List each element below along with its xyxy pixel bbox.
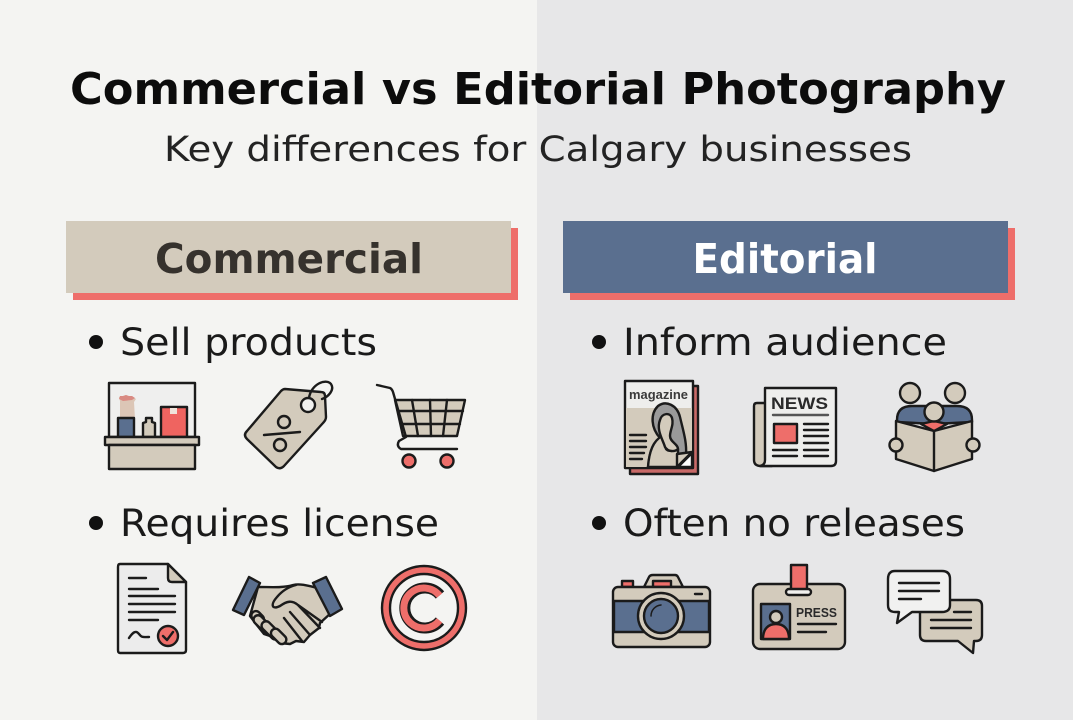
icon: newspaper: NEWS [771,394,828,413]
icon: newspaper [754,388,836,466]
icon: shopping cart [377,385,465,468]
icon: press badge [753,565,845,649]
icon: license document [118,564,186,653]
title: Commercial vs Editorial Photography [70,64,1006,115]
bullet: often no releases: Often no releases [623,502,965,545]
editorial header: Editorial [692,235,878,283]
icon: group reading [890,383,980,471]
icon: copyright [382,566,466,650]
commercial header: Commercial [155,235,423,283]
icon: discount tag [245,382,332,468]
subtitle: Key differences for Calgary businesses [164,130,912,170]
bullet: sell products: Sell products [120,321,377,364]
icon: magazine: magazine [629,387,688,402]
panel: editorial column [563,221,1015,653]
panel: commercial column [66,221,518,653]
icon: speech bubbles [888,571,982,653]
icon: magazine [625,381,698,474]
icon: storefront counter [105,383,199,469]
editorial header [563,221,1015,300]
icon: camera [613,575,710,647]
icon: press badge: PRESS [796,605,837,620]
icon: handshake [233,577,342,646]
bullet: requires license: Requires license [120,502,439,545]
commercial header [66,221,518,300]
bullet: inform audience: Inform audience [623,321,947,364]
